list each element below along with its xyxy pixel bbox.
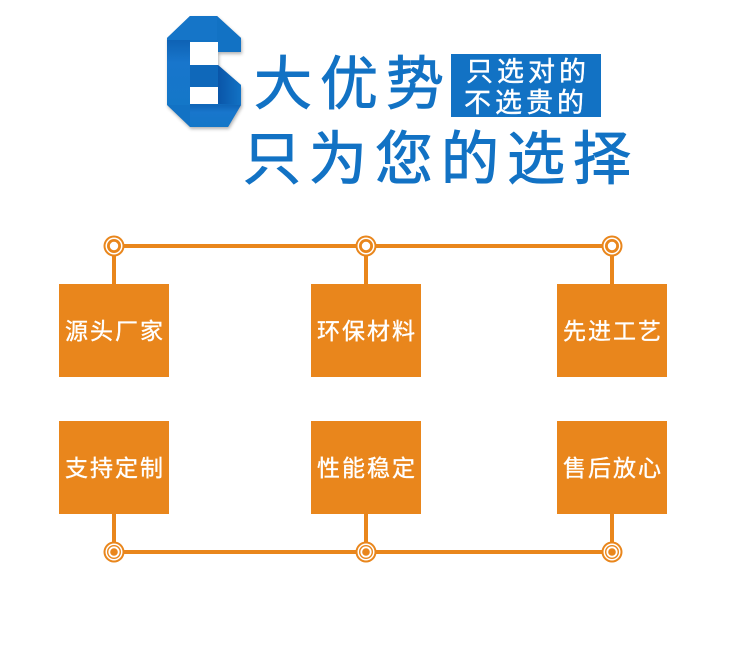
tag: 只选对的 不选贵的: 不选贵的 (464, 88, 588, 118)
panel: 先进工艺: 先进工艺 (563, 318, 663, 344)
panel: 先进工艺 (557, 284, 667, 377)
panel: 支持定制 (59, 421, 169, 514)
panel: 环保材料: 环保材料 (317, 318, 417, 344)
panel: 支持定制: 支持定制 (65, 455, 165, 481)
panel: 性能稳定 (311, 421, 421, 514)
panel: 源头厂家: 源头厂家 (65, 318, 165, 344)
panel: 售后放心 (557, 421, 667, 514)
panel: 性能稳定: 性能稳定 (317, 455, 417, 481)
tag: 只选对的 不选贵的: 只选对的 (466, 57, 590, 87)
tag: 只选对的 不选贵的 (451, 54, 601, 117)
heading: 只为您的选择: 只为您的选择 (243, 127, 639, 192)
panel: 售后放心: 售后放心 (563, 455, 663, 481)
panel: 源头厂家 (59, 284, 169, 377)
panel: 环保材料 (311, 284, 421, 377)
heading: 大优势: 大优势 (254, 52, 452, 117)
